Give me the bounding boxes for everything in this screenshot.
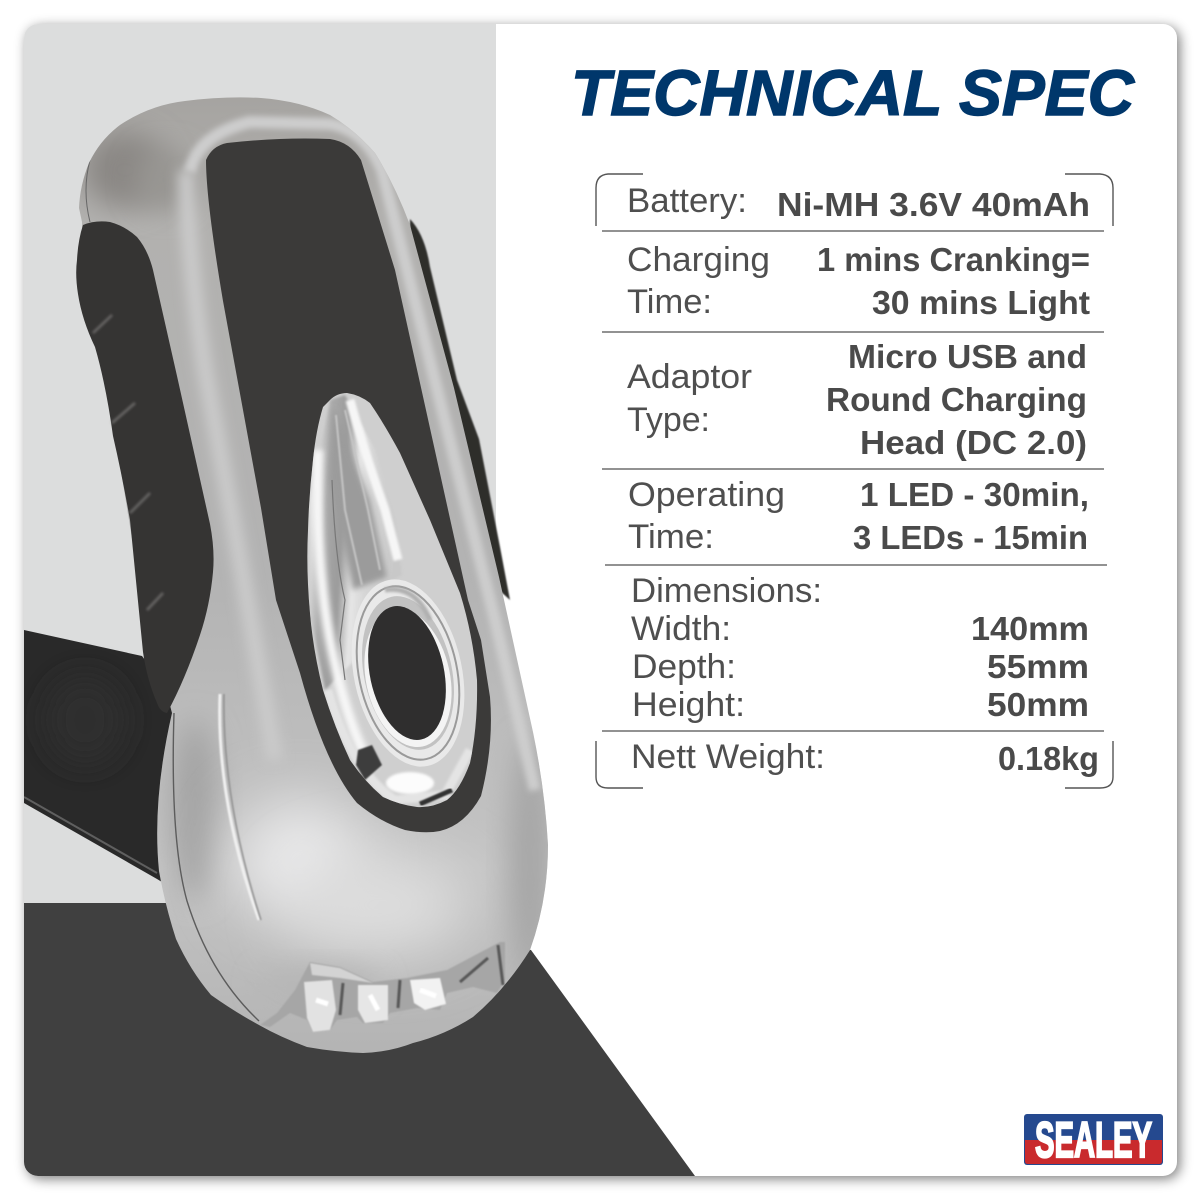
crank handle bbox=[24, 630, 175, 890]
row: adaptor type: Head (DC 2.0) bbox=[860, 424, 1087, 461]
row: nett weight bbox=[634, 743, 1097, 777]
chrome teardrop bbox=[307, 393, 478, 808]
torch body bbox=[70, 90, 560, 1060]
rubber side grip bbox=[76, 221, 214, 713]
row: charging time: 1 mins Cranking= bbox=[817, 241, 1090, 278]
row: operating time: 3 LEDs - 15min bbox=[853, 519, 1088, 556]
row: adaptor type: Round Charging bbox=[826, 381, 1087, 418]
rear rubber grip bbox=[410, 219, 510, 600]
LED lens bbox=[260, 942, 505, 1032]
panel: dark floor shape bbox=[24, 903, 695, 1176]
body seam bbox=[173, 713, 259, 1021]
row: dimensions: 55mm bbox=[987, 648, 1089, 685]
row: charging time: 30 mins Light bbox=[872, 284, 1090, 321]
row: charging time: Charging bbox=[627, 241, 770, 279]
row: adaptor type bbox=[627, 338, 1087, 461]
row: dimensions: 50mm bbox=[987, 686, 1089, 723]
row: nett weight: 0.18kg bbox=[998, 740, 1099, 777]
chrome ring bbox=[352, 580, 464, 766]
row: dimensions: Width: bbox=[631, 610, 731, 648]
LED 2 bbox=[358, 985, 388, 1023]
row: operating time: Time: bbox=[628, 518, 714, 556]
row: charging time bbox=[627, 241, 1090, 321]
top bracket bbox=[596, 174, 1113, 226]
black rubber face panel bbox=[206, 138, 491, 832]
LED 1 bbox=[304, 980, 336, 1032]
row: battery: Ni-MH 3.6V 40mAh bbox=[777, 186, 1090, 223]
panel: light grey backdrop bbox=[24, 24, 496, 903]
row: adaptor type: Adaptor bbox=[627, 358, 752, 396]
row: battery bbox=[630, 188, 1088, 219]
row: dimensions bbox=[631, 572, 1089, 724]
spec table bbox=[596, 174, 1113, 788]
row: battery: Battery: bbox=[627, 182, 747, 220]
row: dimensions: Height: bbox=[632, 686, 745, 724]
body crease highlight bbox=[220, 694, 259, 920]
row: dimensions: 140mm bbox=[971, 610, 1089, 647]
row: operating time: 1 LED - 30min, bbox=[860, 476, 1089, 513]
LED 3 bbox=[410, 978, 446, 1010]
row: dimensions: Dimensions: bbox=[631, 572, 822, 610]
row: dimensions: Depth: bbox=[632, 648, 736, 686]
title: TECHNICAL SPEC bbox=[571, 57, 1135, 129]
row: nett weight: Nett Weight: bbox=[631, 738, 825, 776]
row: adaptor type: Type: bbox=[627, 401, 710, 439]
product: wind-up torch bbox=[24, 90, 560, 1060]
row: operating time bbox=[628, 481, 1087, 550]
row: adaptor type: Micro USB and bbox=[848, 338, 1087, 375]
oval button bbox=[368, 606, 446, 740]
row: charging time: Time: bbox=[627, 283, 712, 321]
row: operating time: Operating bbox=[628, 476, 785, 514]
bottom bracket bbox=[596, 741, 1113, 788]
